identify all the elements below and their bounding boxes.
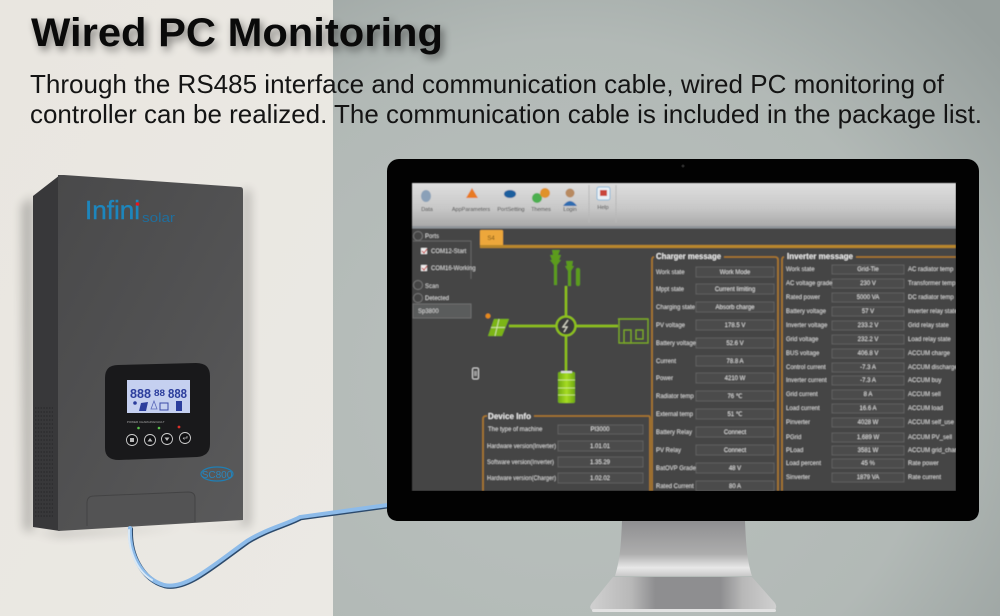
panel: inverter message: Grid relay state — [908, 323, 949, 329]
panel: inverter message: Rate current — [908, 475, 941, 481]
indicator lights: POWER CHARGING — [127, 420, 156, 424]
panel: inverter message: ACCUM PV_sell — [908, 435, 952, 441]
title: Wired PC Monitoring — [31, 11, 443, 55]
flow lines — [509, 286, 618, 372]
panel: inverter message: 16.6 A — [859, 406, 877, 412]
toolbar icons — [421, 187, 610, 206]
panel: inverter message: 5000 VA — [857, 295, 879, 301]
panel: inverter message: 232.2 V — [858, 337, 878, 343]
panel: inverter message: Sinverter — [786, 475, 810, 481]
panel: inverter message: -7.3 A — [860, 365, 876, 371]
panel: charger message: Mppt state — [656, 287, 685, 293]
LCD screen: 888 — [130, 386, 151, 401]
device tree sidebar: COM12-Start — [431, 249, 467, 255]
panel: charger message: Rated Current — [656, 484, 694, 490]
panel: inverter message: Load percent — [786, 461, 821, 467]
panel: inverter message: ACCUM load — [908, 406, 943, 412]
panel: charger message: 4210 W — [725, 376, 746, 382]
panel: charger message: Current limiting — [715, 287, 755, 293]
device tree sidebar: Detected — [425, 296, 449, 302]
panel: device info: 1.02.02 — [590, 476, 611, 482]
house — [618, 319, 648, 343]
panel: inverter message: Grid current — [786, 392, 818, 398]
panel: charger message: Charging state — [656, 305, 696, 311]
inverter controller — [22, 159, 979, 612]
panel: charger message: Current — [656, 359, 676, 365]
panel: inverter message: Rate power — [908, 461, 939, 467]
panel: inverter message: Rated power — [786, 295, 820, 301]
panel: inverter message: 45 % — [861, 461, 875, 467]
monitor stand — [590, 521, 776, 612]
toolbar labels: Login — [563, 207, 577, 213]
panel: inverter message: Load current — [786, 406, 820, 412]
panel: inverter message: Pinverter — [786, 420, 810, 426]
panel: inverter message: PGrid — [786, 435, 801, 441]
panel: inverter message: ACCUM buy — [908, 378, 941, 384]
panel: charger message — [652, 251, 778, 491]
panel: inverter message: 1,689 W — [857, 435, 880, 441]
panel: charger message: External temp — [656, 412, 694, 418]
panel: charger message: BatOVP Grade — [656, 466, 697, 472]
panel: inverter message: ACCUM sell — [908, 392, 941, 398]
panel: device info: Hardware version(Inverter) — [487, 444, 556, 450]
panel: inverter message: ACCUM grid_charge — [908, 448, 964, 454]
software toolbar — [412, 183, 956, 228]
toolbar labels: PortSetting — [497, 207, 525, 213]
toolbar labels — [421, 205, 609, 213]
monitor camera — [682, 164, 684, 168]
panel: device info: The type of machine — [488, 427, 543, 433]
palm trees — [550, 250, 580, 286]
panel: charger message: Power — [656, 376, 673, 382]
panel: inverter message: BUS voltage — [786, 351, 820, 357]
panel: charger message: Charger message — [656, 251, 721, 261]
panel: inverter message: AC voltage grade — [786, 281, 833, 287]
description text: controller can be realized. The communication cable is included in the package list. — [30, 99, 982, 129]
panel: inverter message: Inverter relay state — [908, 309, 958, 315]
panel: charger message: 178.5 V — [725, 323, 745, 329]
indicator lights — [127, 420, 180, 429]
device tree sidebar: Scan — [425, 284, 439, 290]
device tree sidebar: Sp3800 — [418, 309, 439, 315]
panel: inverter message: 3581 W — [858, 448, 879, 454]
monitor bezel — [387, 159, 979, 521]
panel: inverter message: 233.2 V — [858, 323, 878, 329]
device tree sidebar: COM16-Working — [431, 266, 476, 272]
panel: inverter message: -7.3 A — [860, 378, 876, 384]
panel: inverter message: Load relay state — [908, 337, 951, 343]
panel: inverter message: 1879 VA — [857, 475, 879, 481]
panel: charger message: Battery voltage — [656, 341, 697, 347]
control panel — [87, 363, 233, 526]
description text: Through the RS485 interface and communication cable, wired PC monitoring of — [30, 69, 945, 99]
panel: inverter message: Inverter voltage — [786, 323, 828, 329]
panel: charger message: Absorb charge — [715, 305, 755, 311]
device tree sidebar: Ports — [425, 234, 439, 240]
panel: inverter message: 57 V — [862, 309, 874, 315]
flow hub — [556, 316, 576, 336]
toolbar labels: AppParameters — [452, 207, 490, 213]
model badge SC800: SC800 — [202, 470, 233, 481]
panel: inverter message: Transformer temp — [908, 281, 956, 287]
inverter brand logo: Infini — [85, 195, 140, 225]
solar panel — [488, 319, 509, 336]
small device icon — [472, 368, 478, 379]
panel: inverter message: PLoad — [786, 448, 803, 454]
panel: inverter message: DC radiator temp — [908, 295, 954, 301]
panel: inverter message — [782, 251, 964, 491]
panel: charger message: 52.6 V — [726, 341, 744, 347]
inverter side panel — [33, 175, 60, 531]
active tab: S4 — [487, 236, 495, 242]
panel: charger message: PV voltage — [656, 323, 686, 329]
inverter bottom cover — [87, 492, 195, 526]
panel: charger message: Battery Relay — [656, 430, 692, 436]
energy flow diagram — [472, 250, 648, 403]
monitor — [387, 159, 979, 612]
panel: device info — [483, 411, 650, 491]
panel: device info: Hardware version(Charger) — [487, 476, 556, 482]
screen edge masks — [387, 183, 979, 521]
panel: charger message: Radiator temp — [656, 394, 694, 400]
panel: charger message: Work state — [656, 270, 685, 276]
panel: inverter message: 4028 W — [858, 420, 879, 426]
panel: charger message: 76 ℃ — [727, 394, 743, 400]
toolbar labels: Data — [421, 207, 434, 213]
LCD screen: 88 — [154, 388, 165, 398]
panel: device info: PI3000 — [590, 427, 610, 433]
inverter brand logo — [85, 195, 176, 225]
panel: inverter message: 406.8 V — [858, 351, 878, 357]
panel: inverter message: ACCUM charge — [908, 351, 951, 357]
battery — [558, 371, 575, 403]
panel: charger message: 51 ℃ — [727, 412, 743, 418]
panel: charger message: Connect — [724, 448, 747, 454]
panel: charger message: 48 V — [729, 466, 741, 472]
background: wall right side — [333, 0, 1000, 616]
panel: inverter message: Battery voltage — [786, 309, 827, 315]
device tree sidebar — [413, 232, 476, 318]
panel: inverter message: ACCUM discharge — [908, 365, 958, 371]
panel buttons — [126, 432, 190, 446]
panel: inverter message: 8 A — [864, 392, 872, 398]
panel: charger message: 78.8 A — [726, 359, 744, 365]
toolbar labels: Themes — [531, 207, 551, 213]
LCD screen: 888 — [168, 386, 187, 401]
indicator lights: FAULT — [155, 420, 165, 424]
panel: device info: 1.35.29 — [590, 460, 611, 466]
panel: inverter message: Work state — [786, 267, 815, 273]
panel: charger message: Work Mode — [720, 270, 751, 276]
panel: device info: 1.01.01 — [590, 444, 611, 450]
inverter side vents — [35, 408, 53, 516]
background: wall left side — [0, 0, 333, 616]
panel: inverter message: Grid-Tie — [857, 267, 879, 273]
LCD screen — [127, 380, 190, 413]
panel: inverter message: Inverter message — [787, 251, 853, 261]
panel: inverter message: ACCUM self_use — [908, 420, 955, 426]
panel: inverter message: 230 V — [860, 281, 876, 287]
panel: charger message: 80 A — [729, 484, 741, 490]
monitor screen — [412, 183, 964, 491]
panel: inverter message: Grid voltage — [786, 337, 819, 343]
panel: inverter message: Inverter current — [786, 378, 827, 384]
inverter brand logo: solar — [142, 210, 176, 225]
panel: charger message: PV Relay — [656, 448, 681, 454]
panel: device info: Device Info — [488, 411, 531, 421]
inverter wall shadow — [22, 190, 250, 536]
inverter front panel — [58, 175, 243, 531]
description text — [30, 69, 982, 129]
toolbar labels: Help — [597, 205, 609, 211]
panel: charger message: Connect — [724, 430, 747, 436]
panel: inverter message: Control current — [786, 365, 826, 371]
panel: device info: Software version(Inverter) — [487, 460, 554, 466]
communication cable — [129, 505, 389, 587]
panel: inverter message: AC radiator temp — [908, 267, 954, 273]
active tab — [480, 230, 956, 248]
